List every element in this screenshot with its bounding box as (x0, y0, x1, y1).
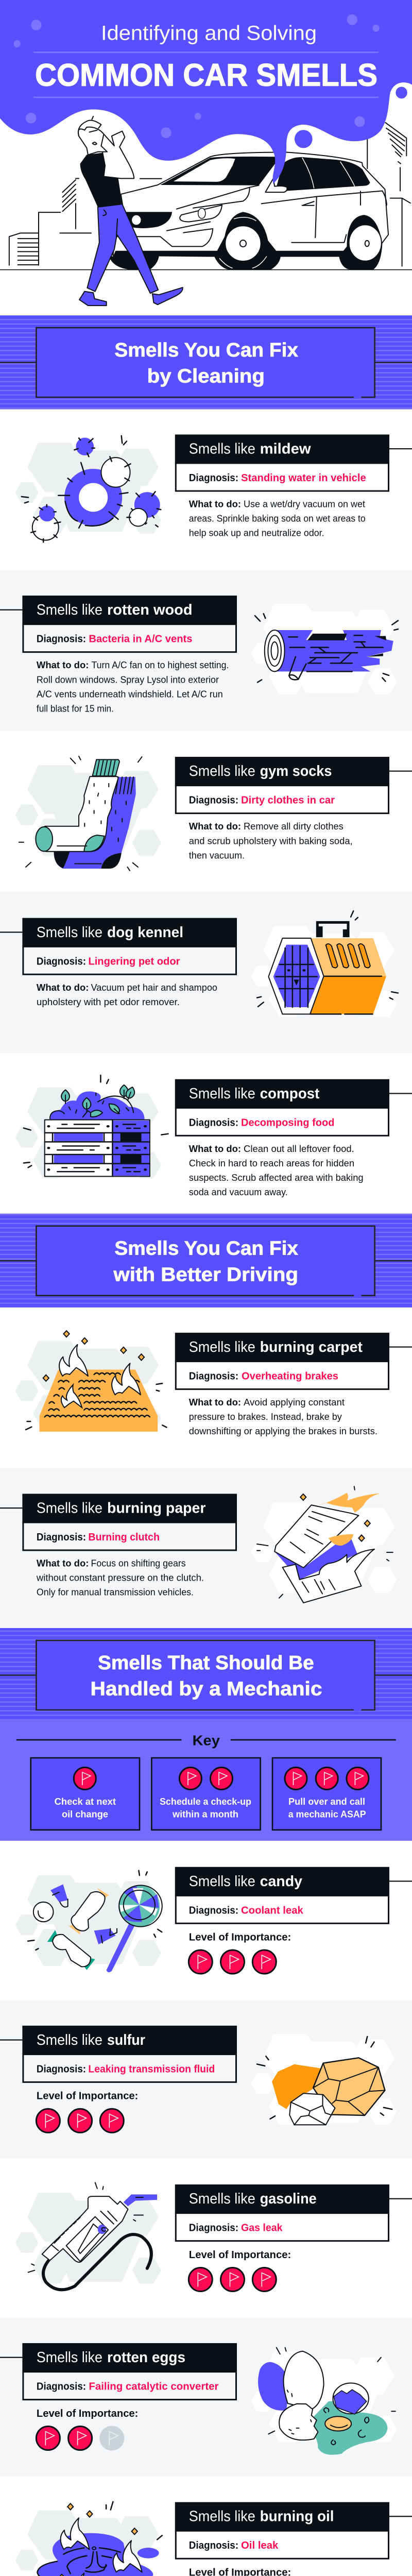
header: Overheating brakes (242, 1370, 338, 1382)
what to do (189, 1397, 377, 1436)
header: Smells like (37, 2032, 102, 2048)
icon: compost crate (18, 1075, 168, 1176)
level of importance (188, 2249, 291, 2292)
icon: gas nozzle (18, 2182, 159, 2290)
key: two flags: within a month (172, 1808, 238, 1819)
icon: burning carpet (18, 1331, 166, 1432)
ground line (0, 269, 412, 270)
what to do: downshifting or applying the brakes in bursts. (189, 1426, 377, 1436)
header (175, 2184, 412, 2241)
header: Diagnosis: (37, 2381, 86, 2393)
header: rotten eggs (107, 2349, 185, 2366)
key: one flag: Check at next (55, 1796, 116, 1807)
header: Smells like (189, 2509, 255, 2525)
header: dog kennel (107, 924, 183, 941)
header: Diagnosis: (189, 2223, 238, 2234)
icon: rotten log (253, 606, 398, 692)
what to do: Focus on shifting gears (91, 1558, 186, 1569)
header: burning carpet (260, 1339, 363, 1355)
header: Diagnosis: (37, 634, 86, 645)
icon: eggs (253, 2348, 396, 2455)
what to do: upholstery with pet odor remover. (37, 996, 180, 1007)
what to do: and scrub upholstery with baking soda, (189, 835, 353, 846)
header: gym socks (260, 763, 332, 779)
what to do (189, 821, 353, 860)
panel: key (0, 1721, 412, 1841)
header (0, 1494, 237, 1550)
header: Diagnosis: (189, 1370, 238, 1382)
key: one flag (31, 1758, 140, 1830)
city skyline (9, 123, 410, 266)
panel: sulfur (0, 2026, 394, 2132)
what to do: Turn A/C fan on to highest setting. (92, 659, 229, 670)
heading (91, 1652, 322, 1700)
what to do (189, 1143, 364, 1197)
what to do: Remove all dirty clothes (244, 821, 344, 832)
header: Gas leak (241, 2223, 283, 2234)
header: Diagnosis: (37, 2063, 86, 2075)
icon: socks (18, 756, 159, 871)
panel: gasoline (18, 2182, 412, 2292)
header: Failing catalytic converter (89, 2381, 219, 2393)
level of importance: Level of Importance: (189, 1932, 291, 1943)
what to do: A/C vents underneath windshield. Let A/C run (37, 688, 223, 699)
header: burning paper (107, 1500, 206, 1517)
what to do: areas. Sprinkle baking soda on wet areas to (189, 513, 366, 524)
key: two flags: Schedule a check-up (160, 1796, 251, 1807)
header: Diagnosis: (37, 1532, 86, 1543)
header: burning oil (260, 2509, 334, 2525)
what to do: Use a wet/dry vacuum on wet (244, 499, 365, 510)
what to do: What to do: (37, 1558, 89, 1569)
header: Smells like (189, 1873, 255, 1890)
level of importance (36, 2091, 138, 2132)
header (175, 434, 412, 491)
hero illustration: car and man pinching nose (0, 116, 412, 306)
what to do: Roll down windows. Spray Lysol into exterior (37, 674, 219, 685)
title line two: COMMON CAR SMELLS (35, 58, 377, 93)
car (109, 152, 388, 270)
header (175, 757, 412, 814)
what to do: pressure to brakes. Instead, brake by (189, 1411, 342, 1422)
heading (114, 340, 298, 387)
header: Smells like (189, 2191, 255, 2207)
hero title blob (0, 0, 412, 184)
what to do: full blast for 15 min. (37, 703, 114, 714)
header: candy (260, 1873, 302, 1890)
panel: rotten eggs (0, 2343, 396, 2455)
level of importance (36, 2408, 138, 2450)
section banner: better driving (0, 1214, 412, 1308)
header: Bacteria in A/C vents (89, 634, 193, 645)
panel: burning oil (14, 2502, 412, 2576)
header: Smells like (37, 2349, 102, 2366)
what to do: without constant pressure on the clutch. (36, 1572, 204, 1583)
what to do: Only for manual transmission vehicles. (37, 1587, 194, 1598)
header (175, 1079, 412, 1136)
header: Diagnosis: (189, 2540, 238, 2551)
level of importance: Level of Importance: (37, 2091, 138, 2102)
header (175, 1867, 412, 1923)
what to do: What to do: (189, 499, 241, 510)
key: three flags (272, 1758, 381, 1830)
level of importance: Level of Importance: (37, 2408, 138, 2419)
header: sulfur (107, 2032, 145, 2048)
what to do: Vacuum pet hair and shampoo (91, 982, 217, 993)
what to do: What to do: (189, 1397, 241, 1408)
section banner: cleaning (0, 315, 412, 409)
what to do: soda and vacuum away. (189, 1187, 288, 1197)
heading: Smells You Can Fix (114, 340, 298, 361)
key: two flags (151, 1758, 261, 1830)
header: Oil leak (241, 2540, 279, 2551)
what to do (37, 982, 217, 1007)
what to do: What to do: (189, 821, 241, 832)
header: gasoline (260, 2191, 317, 2207)
header: Lingering pet odor (88, 956, 180, 967)
heading: Handled by a Mechanic (91, 1679, 322, 1700)
panel: dog kennel (0, 911, 398, 1015)
what to do: Check in hard to reach areas for hidden (189, 1158, 354, 1168)
header: Leaking transmission fluid (88, 2063, 215, 2075)
panel: rotten wood (0, 596, 398, 714)
title line one: Identifying and Solving (101, 22, 317, 45)
header: Smells like (189, 763, 255, 779)
panel: burning paper (0, 1486, 394, 1603)
header: Coolant leak (241, 1905, 304, 1916)
icon: pet carrier (253, 911, 398, 1015)
panel: candy (18, 1867, 412, 1974)
what to do: What to do: (37, 982, 89, 993)
what to do (189, 499, 366, 538)
heading: Smells You Can Fix (114, 1238, 298, 1260)
panel: compost (18, 1075, 412, 1197)
header: Smells like (37, 924, 102, 941)
what to do: What to do: (189, 1143, 241, 1154)
header: Smells like (189, 1339, 255, 1355)
what to do (37, 659, 229, 714)
icon: burning oil puddle (14, 2502, 163, 2576)
header (0, 918, 237, 974)
header: Smells like (189, 441, 255, 457)
header (0, 596, 237, 652)
what to do: Clean out all leftover food. (244, 1143, 354, 1154)
key: three flags: Pull over and call (288, 1796, 365, 1807)
icon: candy (18, 1871, 162, 1972)
what to do: suspects. Scrub affected area with baking (189, 1172, 364, 1183)
what to do: help soak up and neutralize odor. (189, 528, 324, 538)
heading: Smells That Should Be (98, 1652, 314, 1674)
heading (113, 1238, 298, 1285)
section banner: mechanic (0, 1628, 412, 1721)
panel: mildew (18, 434, 412, 542)
icon: sulfur rocks (253, 2036, 394, 2125)
heading: by Cleaning (147, 365, 265, 387)
what to do: What to do: (37, 659, 89, 670)
header (175, 1333, 412, 1389)
header: Diagnosis: (189, 795, 238, 806)
header (175, 2502, 412, 2558)
header: mildew (260, 441, 311, 457)
panel: gym socks (18, 756, 412, 871)
header: Diagnosis: (189, 1117, 238, 1128)
what to do: then vacuum. (189, 850, 245, 860)
header: Smells like (37, 602, 102, 618)
icon: burning paper (253, 1486, 394, 1603)
level of importance: Level of Importance: (189, 2249, 291, 2261)
header: Dirty clothes in car (241, 795, 335, 806)
header: rotten wood (107, 602, 193, 618)
header (0, 2026, 237, 2082)
header: Diagnosis: (37, 956, 86, 967)
panel: burning carpet (18, 1331, 412, 1436)
header: Diagnosis: (189, 472, 238, 484)
header: Diagnosis: (189, 1905, 238, 1916)
key heading: Key (193, 1732, 220, 1748)
header: Smells like (37, 1500, 102, 1517)
header: Standing water in vehicle (241, 472, 366, 484)
header: Smells like (189, 1086, 255, 1102)
icon: mildew spores (18, 436, 161, 542)
key: one flag: oil change (62, 1808, 108, 1819)
what to do: Avoid applying constant (244, 1397, 345, 1408)
header: Decomposing food (241, 1117, 335, 1128)
header: compost (260, 1086, 320, 1102)
key: three flags: a mechanic ASAP (288, 1808, 366, 1819)
what to do (36, 1558, 204, 1598)
header: Burning clutch (88, 1532, 160, 1543)
man (78, 116, 183, 306)
heading: with Better Driving (113, 1264, 298, 1285)
header (0, 2343, 237, 2400)
level of importance (188, 1932, 291, 1974)
